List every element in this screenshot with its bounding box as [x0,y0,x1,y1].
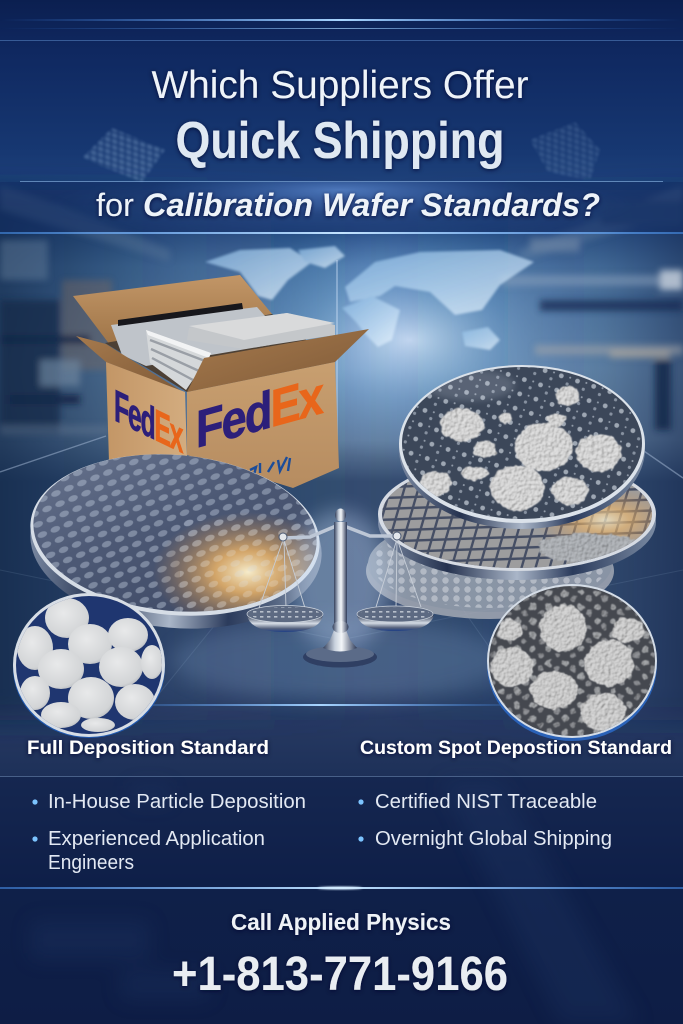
footer glow line [0,886,683,890]
large left wafer [30,454,322,629]
left pan [247,615,323,632]
phone number: +1-813-771-9166 [172,948,508,1001]
back flap [73,275,272,345]
bullet 1 [32,799,38,805]
right pan chains [376,539,421,607]
feature: Experienced Application Engineers [48,828,265,874]
left face [106,362,187,462]
beam [283,526,397,538]
post [334,522,347,626]
bullet 2 [32,836,38,842]
scale glow [290,510,390,650]
logo: FedEx front: FedEx [196,365,324,460]
logo: FedEx side: FedEx [114,379,184,463]
header lines [0,19,683,234]
bullet 3 [358,799,364,805]
right pan [357,615,434,631]
title line 1: Which Suppliers Offer [152,64,529,107]
feature: Certified NIST Traceable: Certified NIST Traceable [375,791,597,813]
left pan chains [259,540,305,608]
feature: In-House Particle Deposition: In-House Particle Deposition [48,791,306,813]
shipping box [73,275,369,488]
box print marks [250,457,290,475]
band: lower panels [0,777,683,1024]
circle: clustered particles [487,584,659,741]
bullet 4 [358,836,364,842]
base [303,646,377,668]
wafer trays in box [111,303,335,390]
feature list [32,791,612,874]
title [96,64,600,223]
band: title backdrop [0,182,683,232]
top wafer with particles [399,365,645,529]
left flap [76,336,183,392]
feature: Experienced Application Engineers: Experienced Application [48,828,265,850]
feature: Experienced Application Engineers: Engineers [48,852,134,874]
faded bottom wafer [366,516,614,619]
floor [0,260,683,705]
world map [205,246,534,350]
title line 3: for Calibration Wafer Standards? [96,187,600,223]
circle: spherical particles [13,593,165,738]
divider [0,776,683,777]
label: Full Deposition Standard: Full Deposition Standard [27,737,269,759]
balance scale [247,508,434,668]
header ghost panels [82,122,600,182]
horizontal glow line [100,704,540,706]
middle wafer [378,478,656,580]
label: Custom Spot Depostion Standard: Custom Spot Depostion Standard [360,737,672,759]
feature: Overnight Global Shipping: Overnight Global Shipping [375,828,612,850]
right flap [187,329,369,392]
call to action: Call Applied Physics [231,909,451,935]
right face [187,362,339,488]
title line 2: Quick Shipping [176,112,504,170]
